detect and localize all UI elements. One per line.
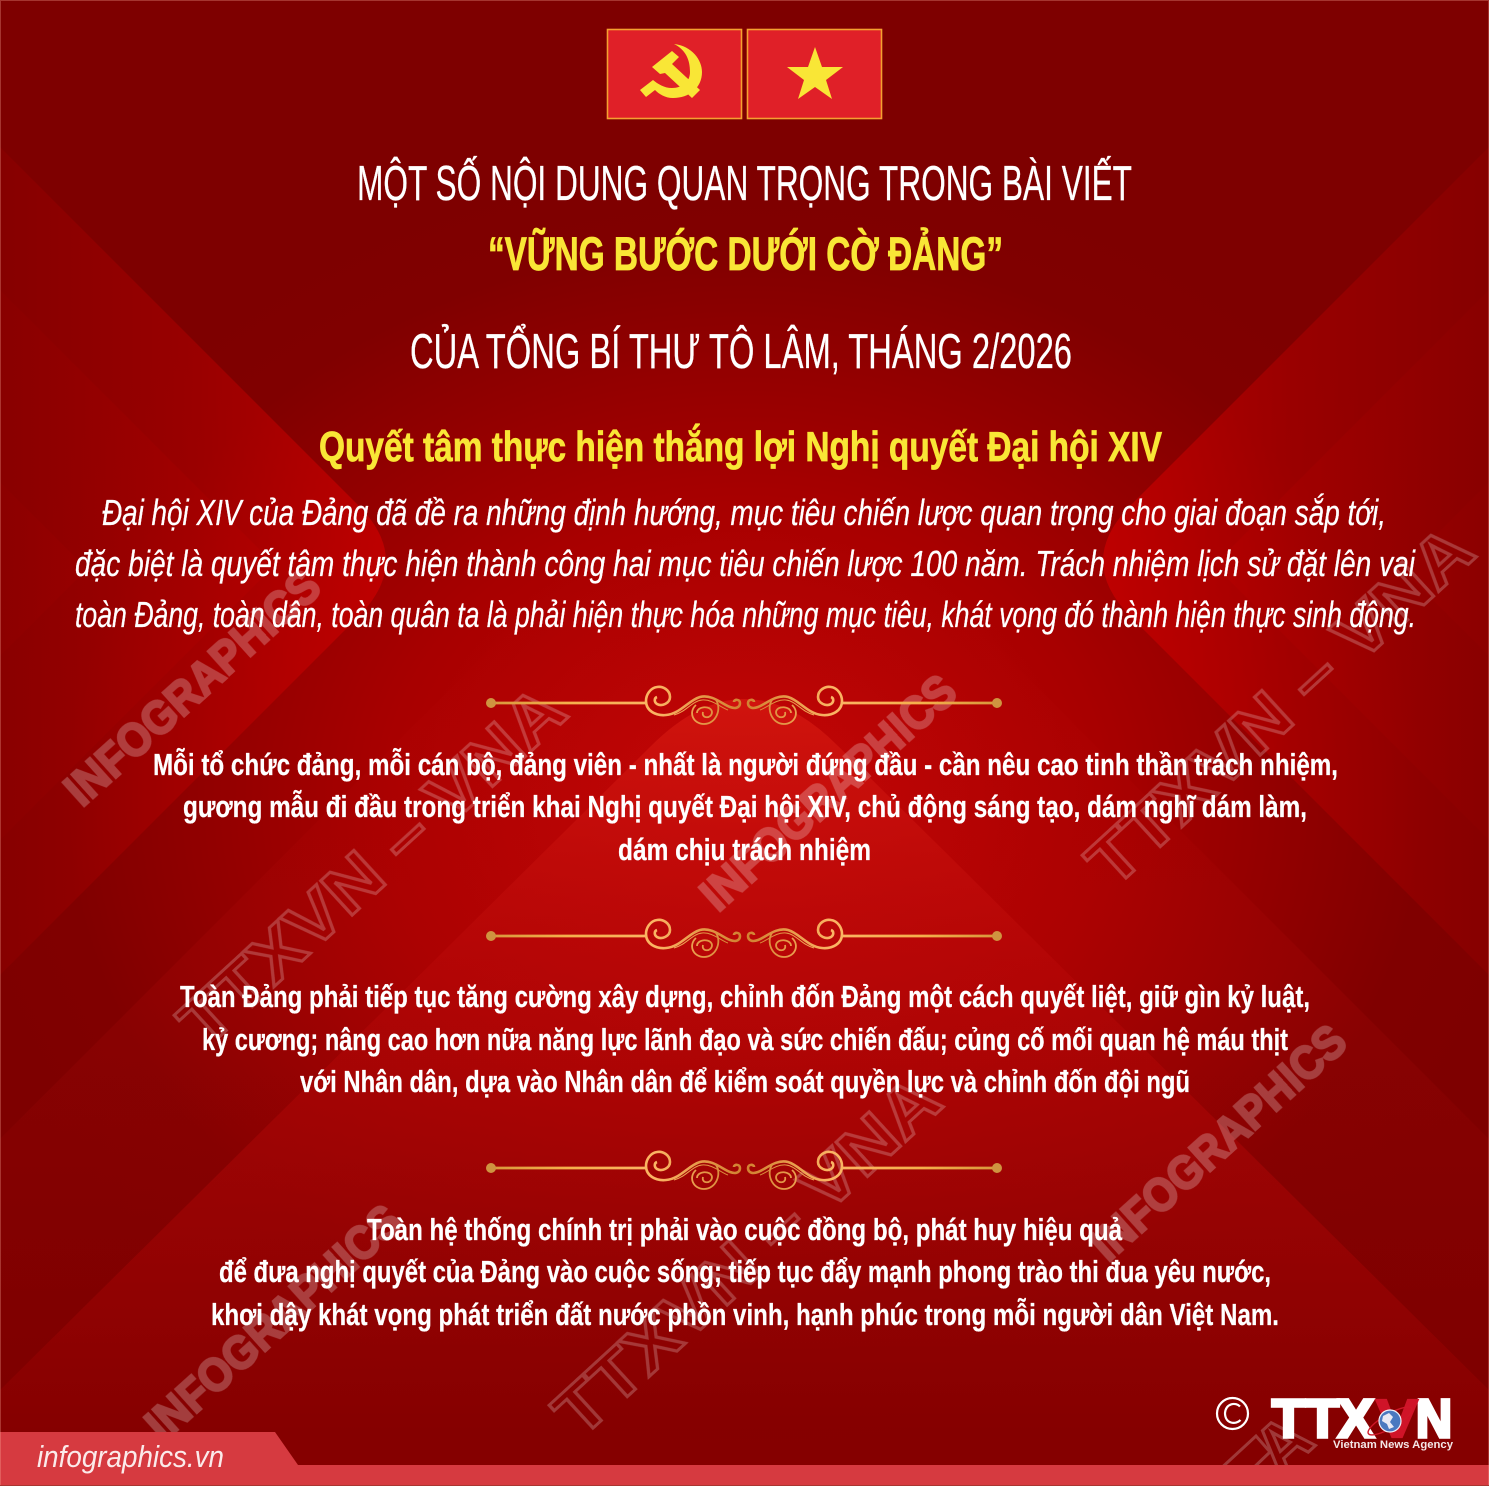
icon: gold star (787, 47, 843, 99)
icon: globe (1365, 1402, 1415, 1440)
watermarks: INFOGRAPHICS: INFOGRAPHICS (1080, 1014, 1356, 1270)
heading: Quyết tâm thực hiện thắng lợi Nghị quyết Đại hội XIV (319, 422, 1162, 470)
logo: TTXVN: N (1416, 1389, 1452, 1449)
watermarks: INFOGRAPHICS: INFOGRAPHICS (54, 559, 330, 815)
copyright symbol (1217, 1398, 1248, 1429)
logo: TTXVN: V (1376, 1389, 1418, 1449)
text block 1 (153, 747, 1338, 867)
watermarks: INFOGRAPHICS: INFOGRAPHICS (690, 664, 966, 920)
ornament divider 1 (486, 687, 1002, 724)
watermarks: TTXVN outline: TTXVN – VNA (539, 1061, 955, 1451)
logo: TTXVN: T (1272, 1389, 1305, 1449)
website label: infographics.vn (37, 1439, 224, 1474)
watermarks: TTXVN outline: TTXVN – VNA (1072, 511, 1488, 901)
text block 2 (180, 979, 1310, 1099)
icon: hammer and sickle (640, 44, 702, 98)
watermarks: TTXVN outline (164, 511, 1488, 1486)
watermarks: INFOGRAPHICS: INFOGRAPHICS (135, 1194, 411, 1450)
intro paragraph (75, 492, 1416, 635)
ornament divider 2 (486, 920, 1002, 957)
text block 1: dám chịu trách nhiệm (618, 832, 871, 867)
logo: TTXVN (1272, 1389, 1454, 1451)
watermarks: INFOGRAPHICS (54, 559, 1356, 1450)
logo: TTXVN: Vietnam News Agency (1333, 1439, 1454, 1451)
title (357, 156, 1132, 379)
watermarks: TTXVN outline: TTXVN – VNA (164, 671, 580, 1061)
text block 3: Toàn hệ thống chính trị phải vào cuộc đồng bộ, phát huy hiệu quả (367, 1212, 1123, 1247)
flag: Vietnam (748, 30, 882, 118)
title: “VỮNG BƯỚC DƯỚI CỜ ĐẢNG” (488, 227, 1003, 280)
ornament divider 3 (486, 1152, 1002, 1189)
title: CỦA TỔNG BÍ THƯ TÔ LÂM, THÁNG 2/2026 (410, 324, 1072, 379)
logo: TTXVN: T (1306, 1389, 1339, 1449)
text block 2: với Nhân dân, dựa vào Nhân dân để kiểm soát quyền lực và chỉnh đốn đội ngũ (300, 1064, 1190, 1099)
flag: Communist Party (608, 30, 742, 118)
footer bar (0, 1432, 1489, 1485)
text block 3 (211, 1212, 1279, 1332)
logo: TTXVN: X (1338, 1389, 1374, 1449)
